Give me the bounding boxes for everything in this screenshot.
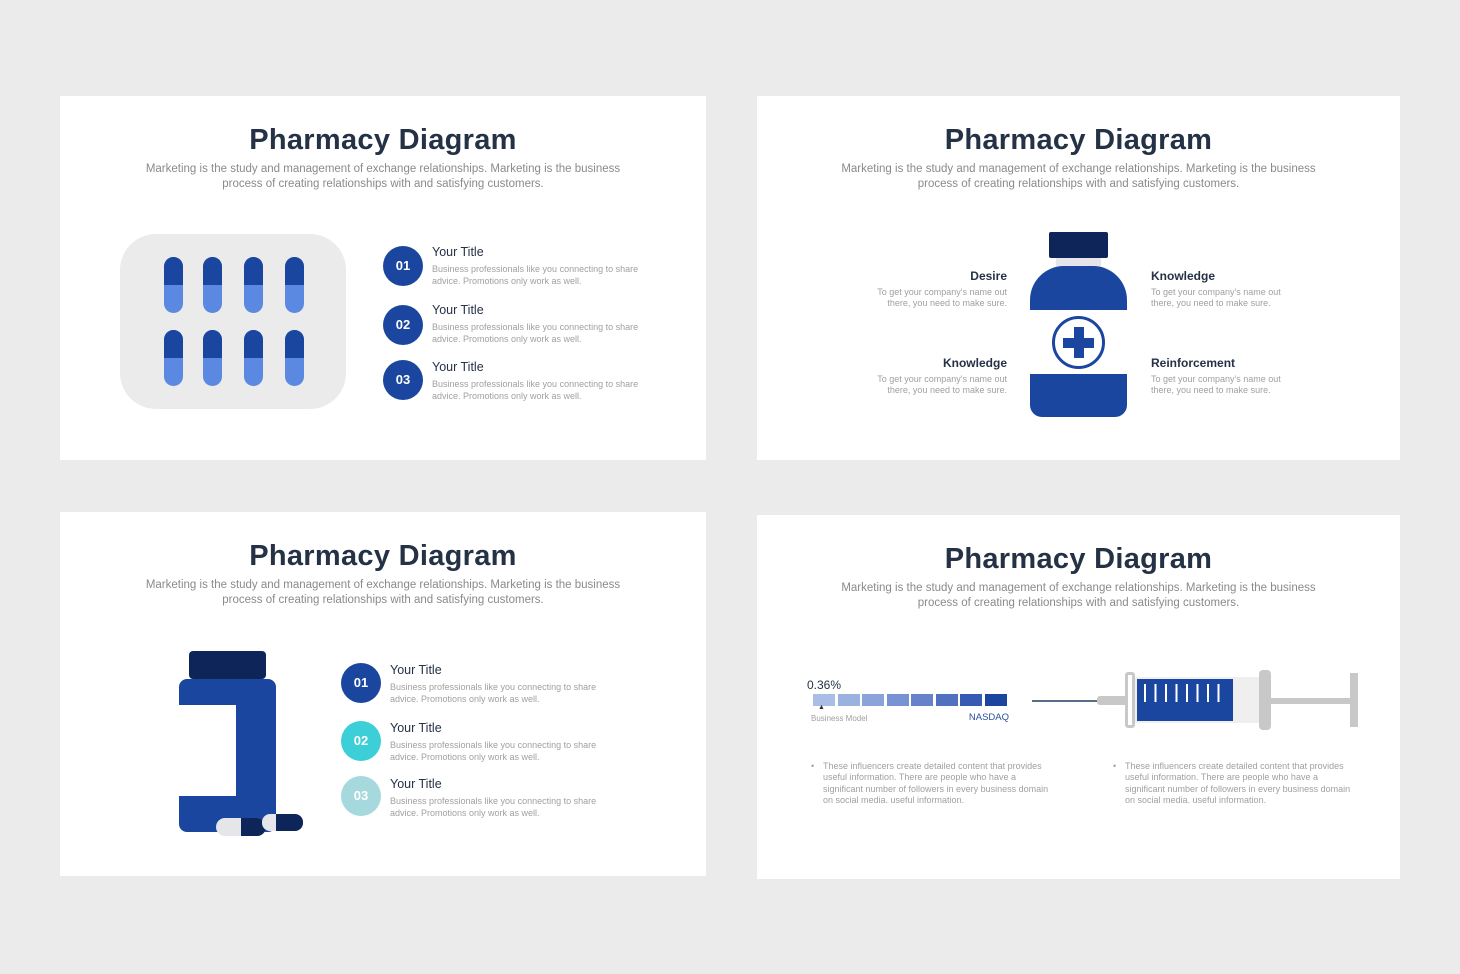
subtitle: Marketing is the study and management of exchange relationships. Marketing is the business (841, 582, 1316, 594)
item 02: Your Title (390, 721, 442, 735)
icon: syringe (1032, 670, 1358, 730)
item 03: Business professionals like you connecting to share advice. Promotions only work as well. (432, 379, 638, 401)
chart: gradient scale bar: NASDAQ (969, 712, 1009, 723)
icon: pill bottle with pills (179, 651, 303, 836)
item 02: 02 (396, 317, 410, 332)
label: Knowledge right (1151, 269, 1281, 308)
label: Desire: Desire (970, 269, 1007, 283)
icon: pill blister tray (120, 234, 346, 409)
chart: gradient scale bar: ▲ (818, 704, 825, 711)
item 03: Your Title (390, 777, 442, 791)
text block: left bullet: • (811, 761, 814, 771)
subtitle (841, 163, 1316, 190)
subtitle (146, 163, 620, 190)
item 03: 03 (354, 788, 368, 803)
chart: gradient scale bar: Business Model (811, 714, 867, 723)
text block: right bullet: These influencers create detailed content that provides useful information. There are people who have a significant number of followers in every business domain on social media. useful information. (1125, 761, 1350, 805)
panel: bottle with list (60, 512, 706, 876)
item 01: Business professionals like you connecting to share advice. Promotions only work as well. (432, 264, 638, 286)
subtitle (146, 579, 620, 606)
subtitle: process of creating relationships with and satisfying customers. (222, 178, 544, 190)
item 01: 01 (354, 675, 368, 690)
panel: pill tray (60, 96, 706, 460)
item 03: Business professionals like you connecting to share advice. Promotions only work as well. (390, 796, 596, 818)
label: Desire (877, 269, 1007, 308)
label: Reinforcement (1151, 356, 1281, 395)
label: Knowledge left: To get your company's name out there, you need to make sure. (877, 374, 1007, 395)
subtitle (841, 582, 1316, 608)
label: Reinforcement: To get your company's name out there, you need to make sure. (1151, 374, 1281, 395)
item 02: Business professionals like you connecting to share advice. Promotions only work as well. (432, 322, 638, 344)
item 01: 01 (396, 258, 410, 273)
item 01: Your Title (432, 245, 484, 259)
label: Reinforcement: Reinforcement (1151, 356, 1235, 370)
title: Pharmacy Diagram (945, 543, 1212, 575)
icon: medicine bottle with cross (1030, 232, 1127, 417)
item 01: Your Title (390, 663, 442, 677)
text block: right bullet: • (1113, 761, 1116, 771)
panel: syringe (757, 515, 1400, 879)
item 03 (383, 360, 638, 401)
item 03: Your Title (432, 360, 484, 374)
item 02 (383, 303, 638, 345)
chart: gradient scale bar (807, 678, 1009, 723)
item 01 (341, 663, 596, 704)
subtitle: process of creating relationships with and satisfying customers. (918, 178, 1239, 190)
item 03: 03 (396, 372, 410, 387)
label: Knowledge left: Knowledge (943, 356, 1007, 370)
subtitle: Marketing is the study and management of exchange relationships. Marketing is the business (146, 579, 620, 591)
item 02: Your Title (432, 303, 484, 317)
title: Pharmacy Diagram (945, 124, 1212, 156)
panel: bottle with four labels (757, 96, 1400, 460)
item 01 (383, 245, 638, 286)
subtitle: process of creating relationships with and satisfying customers. (918, 596, 1239, 608)
item 02: Business professionals like you connecting to share advice. Promotions only work as well. (390, 740, 596, 762)
subtitle: Marketing is the study and management of exchange relationships. Marketing is the business (841, 163, 1316, 175)
chart: gradient scale bar: 0.36% (807, 678, 841, 692)
subtitle: Marketing is the study and management of exchange relationships. Marketing is the business (146, 163, 620, 175)
label: Desire: To get your company's name out there, you need to make sure. (877, 287, 1007, 308)
item 01: Business professionals like you connecting to share advice. Promotions only work as well. (390, 682, 596, 704)
label: Knowledge right: To get your company's name out there, you need to make sure. (1151, 287, 1281, 308)
item 02 (341, 721, 596, 762)
subtitle: process of creating relationships with and satisfying customers. (222, 594, 544, 606)
item 03 (341, 776, 596, 818)
title: Pharmacy Diagram (249, 540, 517, 572)
item 02: 02 (354, 733, 368, 748)
label: Knowledge right: Knowledge (1151, 269, 1215, 283)
title: Pharmacy Diagram (249, 124, 517, 156)
label: Knowledge left (877, 356, 1007, 395)
text block: left bullet: These influencers create detailed content that provides useful information. There are people who have a significant number of followers in every business domain on social media. useful information. (823, 761, 1048, 805)
